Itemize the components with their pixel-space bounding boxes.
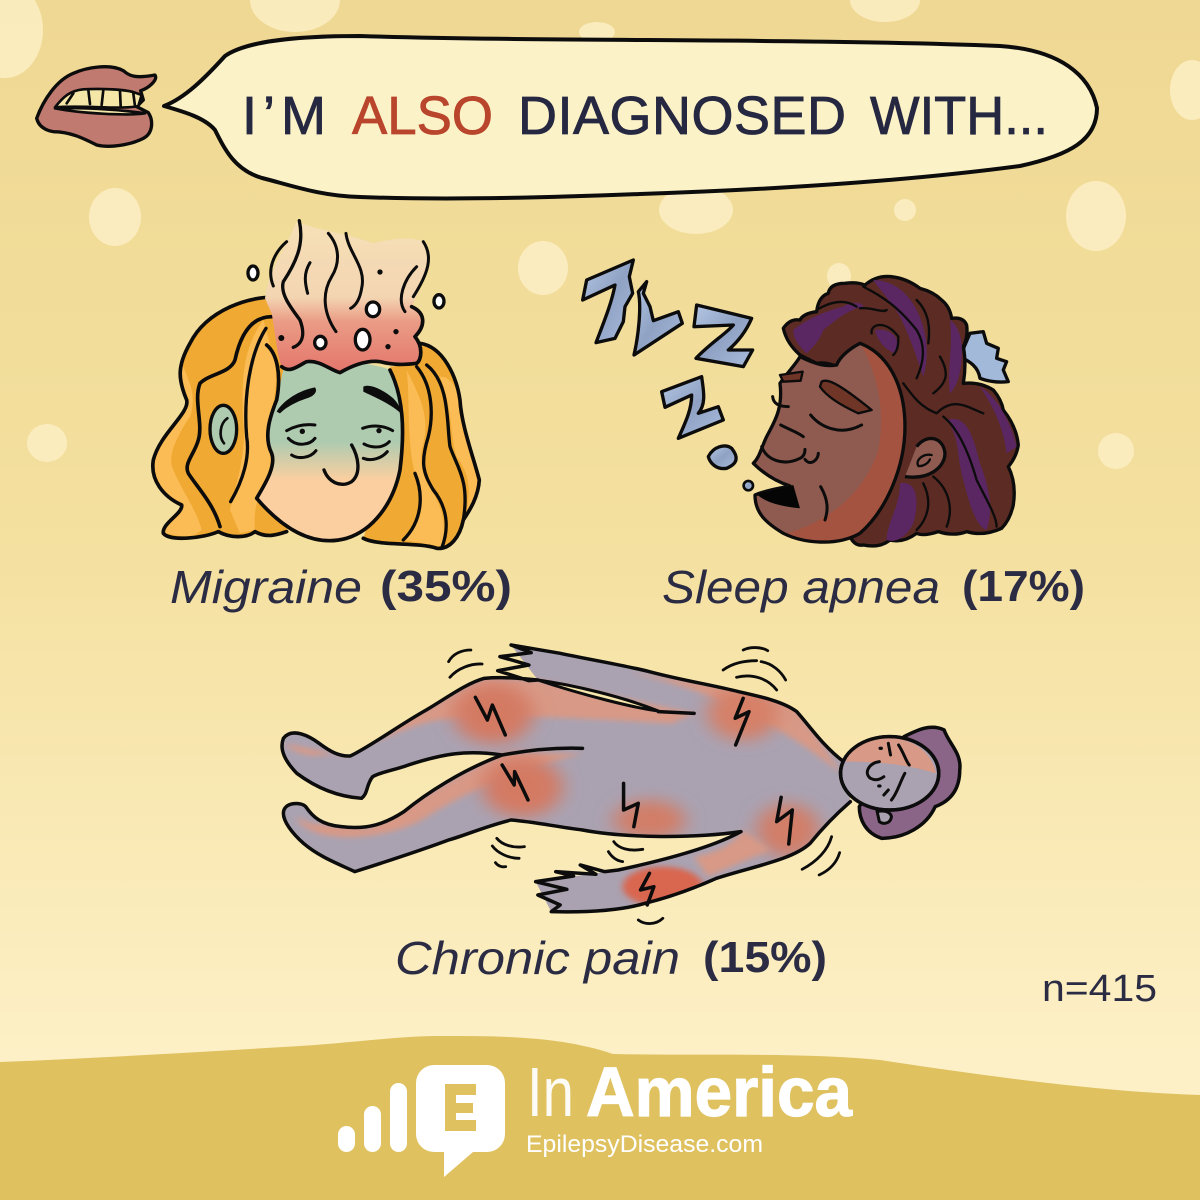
- label: chronic pain: [395, 932, 827, 984]
- label: chronic pain: (15%): [703, 933, 827, 982]
- label: sleep apnea: (17%): [962, 562, 1085, 611]
- zzz: [583, 260, 753, 490]
- hair: [783, 276, 1018, 546]
- illustration: migraine head: [153, 221, 479, 548]
- label: migraine: (35%): [380, 562, 512, 611]
- footer band: [0, 1036, 1200, 1200]
- icon: mouth speaking: [37, 67, 156, 146]
- label: migraine: Migraine: [170, 561, 362, 613]
- body fill with pain patches: [284, 648, 850, 910]
- left hair: [153, 297, 307, 538]
- heading: DIAGNOSED: [518, 86, 846, 146]
- logo: wordmark: America: [586, 1053, 853, 1131]
- face: [257, 345, 403, 541]
- heading: [242, 86, 1048, 146]
- speech bubble: [164, 36, 1097, 198]
- label: sleep apnea: [662, 561, 1085, 613]
- logo: wordmark: [526, 1053, 853, 1158]
- label: chronic pain: Chronic pain: [395, 932, 680, 984]
- body outline: [282, 645, 850, 912]
- gap between arm and torso: [538, 680, 658, 711]
- logo: bar and speech bubble icon: [338, 1065, 505, 1177]
- flames: [248, 221, 444, 373]
- lightning bolts: [475, 697, 792, 905]
- face: [753, 343, 945, 542]
- logo: wordmark: In: [527, 1053, 574, 1131]
- motion marks: [449, 648, 840, 924]
- heading: WITH...: [870, 86, 1048, 146]
- right hair: [363, 343, 479, 548]
- hair behind head: [859, 727, 960, 838]
- sample size note: n=415: [1042, 968, 1157, 1010]
- head: [841, 737, 939, 823]
- label: migraine: [170, 561, 512, 613]
- heading: I’M: [242, 86, 326, 146]
- label: sleep apnea: Sleep apnea: [662, 561, 940, 613]
- heading: ALSO: [352, 86, 493, 146]
- illustration: sleeping head with zzz: [583, 260, 1018, 546]
- illustration: body with chronic pain: [270, 630, 970, 930]
- logo: wordmark: EpilepsyDisease.com: [526, 1131, 763, 1158]
- decorative background blobs: [0, 0, 1200, 469]
